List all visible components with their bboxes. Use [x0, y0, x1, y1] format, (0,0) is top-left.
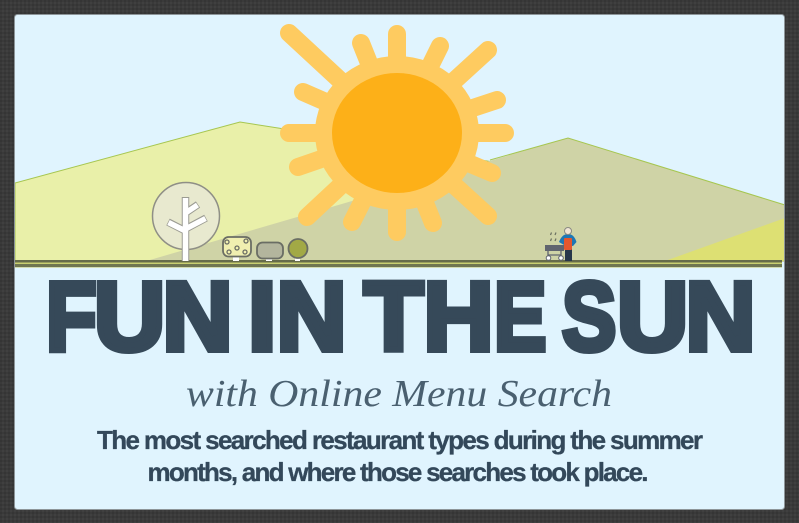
person — [565, 249, 572, 261]
icon: large tree — [152, 182, 220, 261]
title: S — [562, 262, 617, 370]
smoke — [550, 232, 556, 241]
subtitle: with Online Menu Search — [186, 373, 612, 415]
title: N — [162, 262, 233, 370]
right mountain ridge line — [490, 138, 785, 205]
title: N — [686, 262, 756, 370]
ground stripes — [15, 260, 782, 268]
icon: dotted bush — [223, 237, 251, 261]
icon: sun — [289, 33, 505, 232]
grill — [545, 245, 564, 251]
icon: grey hedge — [257, 242, 283, 261]
foreground hill — [665, 218, 785, 261]
title: T — [364, 262, 423, 370]
title: E — [494, 262, 547, 370]
left mountain — [15, 122, 500, 262]
title: F — [46, 262, 96, 370]
sun core — [332, 73, 462, 193]
title: U — [617, 262, 688, 370]
icon: person at barbecue — [545, 228, 576, 261]
title: I — [248, 262, 277, 370]
sun halo — [315, 56, 479, 210]
description: months, and where those searches took place. — [148, 457, 648, 487]
icon: round shrub — [288, 239, 308, 261]
title: U — [94, 262, 165, 370]
description — [97, 425, 703, 487]
landscape — [15, 122, 785, 268]
title: N — [276, 262, 347, 370]
title — [46, 262, 756, 370]
right mountain — [143, 138, 785, 262]
title: H — [424, 262, 494, 370]
sun rays — [289, 33, 505, 232]
description: The most searched restaurant types during the summer — [97, 425, 703, 455]
